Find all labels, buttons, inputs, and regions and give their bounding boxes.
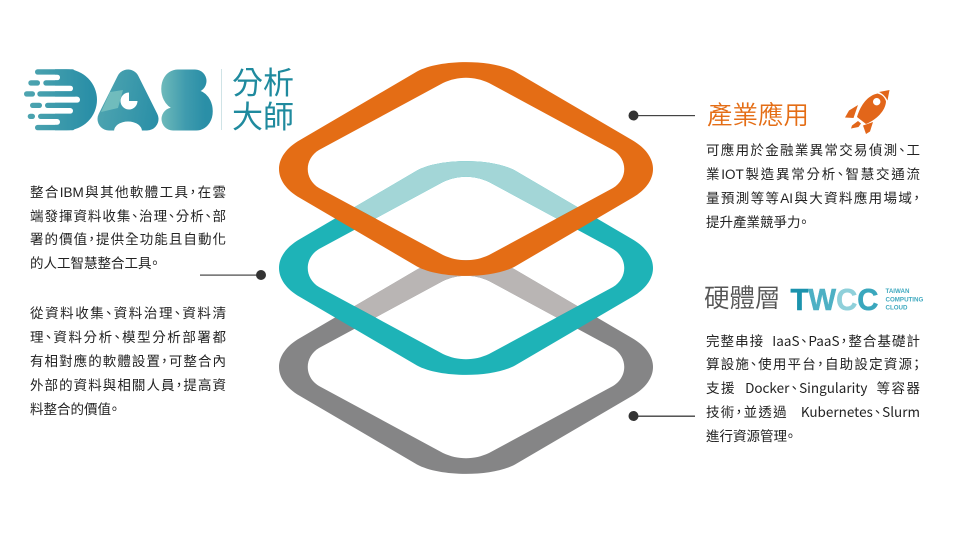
left description: data pipeline: 有相對應的軟體設置，可整合內 <box>30 354 226 369</box>
left description: data pipeline: 從資料收集、資料治理、資料清 <box>30 306 226 321</box>
hardware description <box>706 330 920 445</box>
brand name: 大師 <box>232 100 294 135</box>
left description: integration: 的人工智慧整合工具。 <box>30 256 158 271</box>
hardware description: 技術，並透過 Kubernetes、Slurm <box>706 401 920 421</box>
application description: 業IOT製造異常分析、智慧交通流 <box>706 167 920 182</box>
heading: hardware layer: 硬體層 <box>704 285 781 313</box>
left description: data pipeline: 外部的資料與相關人員，提高資 <box>30 378 226 393</box>
TWCC tagline: COMPUTING <box>886 296 923 303</box>
heading: application layer: 產業應用 <box>707 102 809 130</box>
application description: 可應用於金融業異常交易偵測、工 <box>706 143 920 158</box>
letter S <box>173 81 201 119</box>
letter A with clock cutout <box>101 81 147 140</box>
connector: left <box>200 270 266 280</box>
application description: 量預測等等AI與大資料應用場域， <box>706 191 920 206</box>
application description <box>706 143 920 230</box>
left description: data pipeline: 理、資料分析、模型分析部署都 <box>30 330 226 345</box>
TWCC tagline: TAIWAN <box>886 288 910 295</box>
connector: hardware <box>628 411 695 421</box>
hardware description: 算設施、使用平台，自助設定資源； <box>706 353 920 373</box>
left description: data pipeline <box>30 306 226 417</box>
TWCC tagline <box>886 288 923 312</box>
letter D with speed lines <box>24 69 97 130</box>
brand name: 分析 <box>232 66 294 101</box>
TWCC wordmark: TWCC <box>790 282 878 317</box>
left description: integration: 整合IBM與其他軟體工具，在雲 <box>30 185 226 200</box>
left description: integration <box>30 185 226 271</box>
gray hardware ring <box>279 260 653 474</box>
layered ring diagram <box>279 62 653 474</box>
connector: application <box>628 110 695 120</box>
hardware description: 完整串接 IaaS、PaaS，整合基礎計 <box>706 330 920 350</box>
application description: 提升產業競爭力。 <box>706 215 807 230</box>
left description: integration: 署的價值，提供全功能且自動化 <box>30 232 226 247</box>
logo divider <box>221 69 222 130</box>
teal platform ring <box>279 161 653 375</box>
left description: integration: 端發揮資料收集、治理、分析、部 <box>30 209 226 224</box>
left description: data pipeline: 料整合的價值。 <box>30 402 118 417</box>
hardware description: 進行資源管理。 <box>706 425 794 445</box>
hardware description: 支援 Docker、Singularity 等容器 <box>706 377 920 397</box>
icon: rocket <box>845 90 890 134</box>
TWCC tagline: CLOUD <box>886 305 908 312</box>
orange application ring <box>279 62 653 276</box>
brand name <box>232 66 294 135</box>
